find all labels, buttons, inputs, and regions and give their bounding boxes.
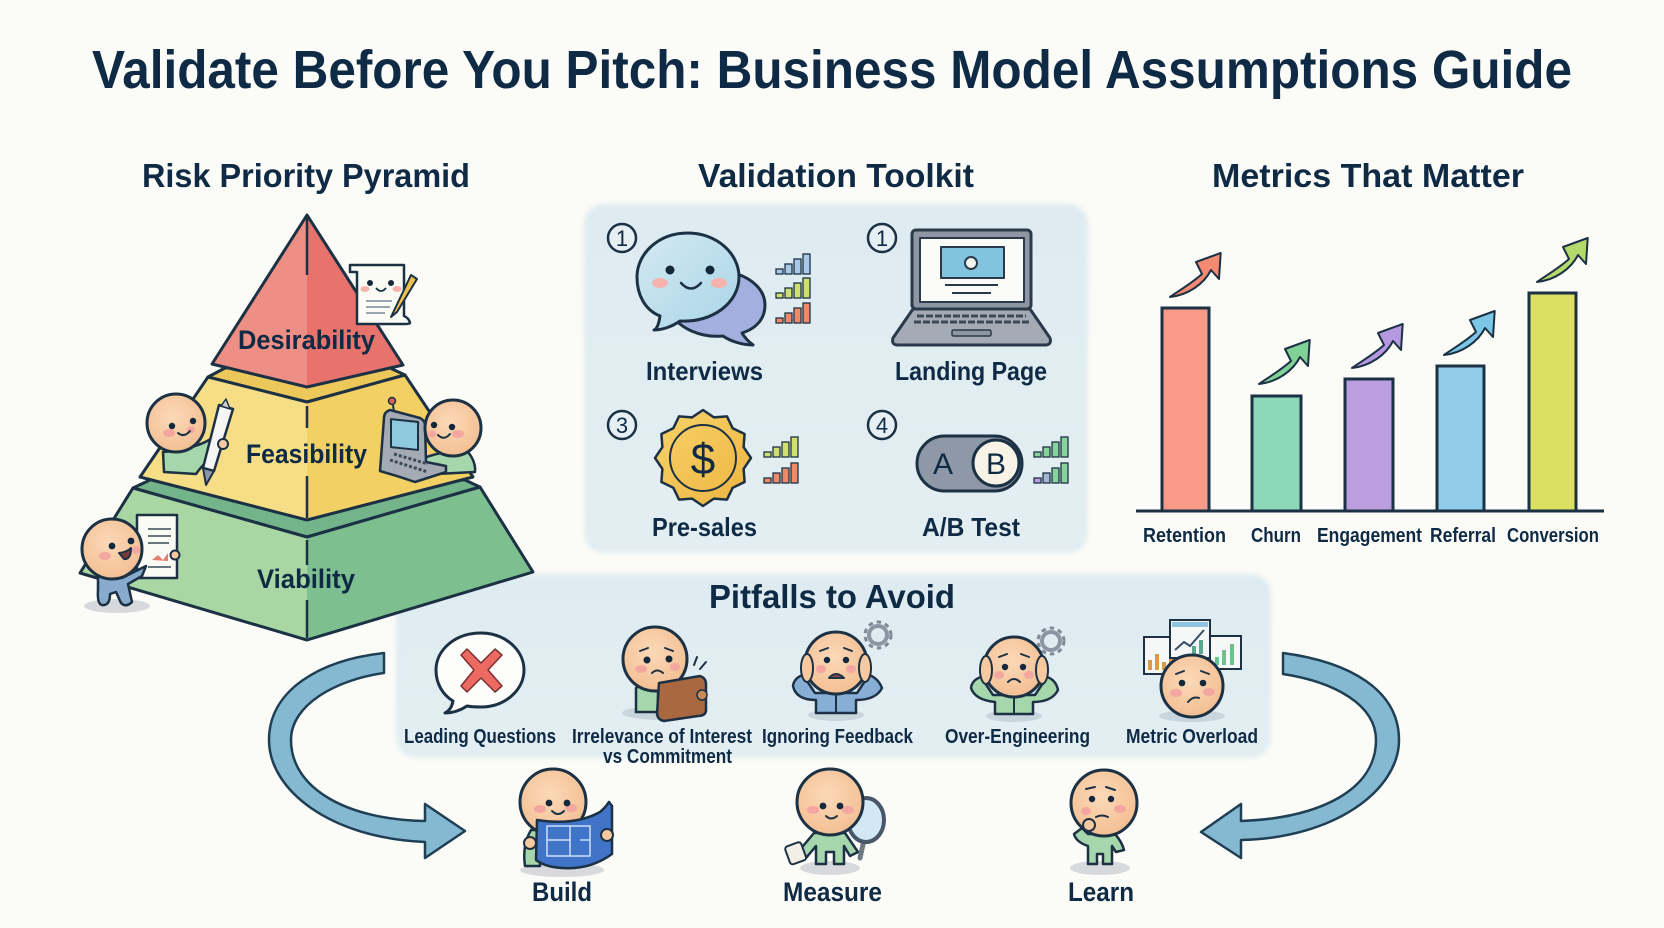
label: landing page: Landing Page <box>895 356 1047 386</box>
label: ignoring feedback: Ignoring Feedback <box>762 726 914 748</box>
label: measure: Measure <box>783 877 882 907</box>
mini bars: pre-sales red <box>764 463 798 483</box>
label: conversion: Conversion <box>1507 525 1599 547</box>
bar: churn <box>1252 396 1301 511</box>
icon: person with wallet <box>622 627 707 721</box>
tier: viability: Viability <box>257 564 355 594</box>
tier: viability <box>80 480 533 640</box>
mini bars: A/B green <box>1034 437 1068 457</box>
icon: gear two <box>1038 628 1064 654</box>
tier: desirability <box>212 215 403 387</box>
label: A/B test: A/B Test <box>922 512 1020 542</box>
label: retention: Retention <box>1143 525 1226 547</box>
number badge 1 <box>608 224 636 252</box>
icon: A/B toggle <box>917 436 1022 491</box>
panel: validation toolkit <box>584 204 1088 553</box>
icon: person over-engineering <box>971 637 1058 722</box>
mini bars: lime <box>776 278 810 298</box>
arrow: retention <box>1170 253 1221 297</box>
label: metric overload: Metric Overload <box>1126 726 1258 748</box>
axis <box>1136 510 1604 512</box>
arrow: engagement <box>1352 324 1403 368</box>
label: over-engineering: Over-Engineering <box>945 726 1090 748</box>
heading: risk priority pyramid: Risk Priority Pyramid <box>142 157 470 194</box>
arrow: referral <box>1444 311 1495 355</box>
number badge 1 second: 1 <box>876 226 888 251</box>
label: build: Build <box>532 877 592 907</box>
icon: A/B toggle: A <box>933 448 953 481</box>
icon: person with metric overload <box>1144 620 1241 722</box>
mini bars: red <box>776 303 810 323</box>
pyramid <box>80 215 533 640</box>
arrow: churn <box>1259 340 1310 384</box>
character: viability with report <box>82 515 180 613</box>
label: irrelevance of interest vs commitment: vs Commitment <box>603 746 732 768</box>
heading: pitfalls: Pitfalls to Avoid <box>709 578 955 615</box>
label: learn: Learn <box>1068 877 1134 907</box>
heading: metrics that matter: Metrics That Matter <box>1212 157 1524 194</box>
tier: desirability: Desirability <box>238 325 375 355</box>
character: build with blueprint <box>520 769 613 877</box>
number badge 4: 4 <box>876 413 888 438</box>
tier: feasibility: Feasibility <box>246 439 367 469</box>
icon: gear one <box>865 622 891 648</box>
icon: pre-sales coin <box>655 410 751 506</box>
label: pre-sales: Pre-sales <box>652 512 757 542</box>
label: leading questions: Leading Questions <box>404 726 556 748</box>
arrow: right curved to learn <box>1201 653 1399 858</box>
label: engagement: Engagement <box>1317 525 1422 547</box>
icon: pre-sales coin: $ <box>691 435 715 484</box>
tier: feasibility <box>140 368 473 520</box>
mini bars: pre-sales lime <box>764 437 798 457</box>
character: learn thinking <box>1070 770 1137 875</box>
label: irrelevance of interest vs commitment <box>572 726 752 768</box>
heading: validation toolkit: Validation Toolkit <box>698 157 974 194</box>
character: feasibility left with pen <box>147 394 233 485</box>
panel: metrics bar chart <box>1136 238 1604 547</box>
label: irrelevance of interest vs commitment: Irrelevance of Interest <box>572 726 752 748</box>
title: Validate Before You Pitch: Business Model Assumptions Guide <box>92 40 1572 100</box>
bar: retention <box>1162 308 1209 511</box>
arrow: left curved to build <box>269 653 465 858</box>
icon: interview speech bubbles <box>637 233 765 345</box>
label: churn: Churn <box>1251 525 1301 547</box>
icon: A/B toggle: B <box>986 448 1006 481</box>
label: interviews: Interviews <box>646 356 763 386</box>
bar: conversion <box>1529 293 1576 511</box>
number badge 1 second <box>868 224 896 252</box>
number badge 4 <box>868 411 896 439</box>
character: feasibility right with terminal <box>380 398 481 482</box>
mini bars: A/B purple green <box>1034 463 1068 483</box>
character: measure with magnifier <box>784 769 884 875</box>
panel: pitfalls to avoid <box>396 574 1271 768</box>
number badge 3 <box>608 411 636 439</box>
icon: leading questions bubble <box>436 633 524 713</box>
icon: person ignoring feedback <box>793 632 882 721</box>
label: referral: Referral <box>1430 525 1496 547</box>
number badge 3: 3 <box>616 413 628 438</box>
icon: laptop landing page <box>893 230 1050 345</box>
number badge 1: 1 <box>616 226 628 251</box>
icon: paper and pencil on pyramid <box>350 265 417 324</box>
bar: engagement <box>1345 379 1393 511</box>
mini bars: blue <box>776 254 810 274</box>
arrow: conversion <box>1537 238 1588 282</box>
bar: referral <box>1437 366 1484 511</box>
